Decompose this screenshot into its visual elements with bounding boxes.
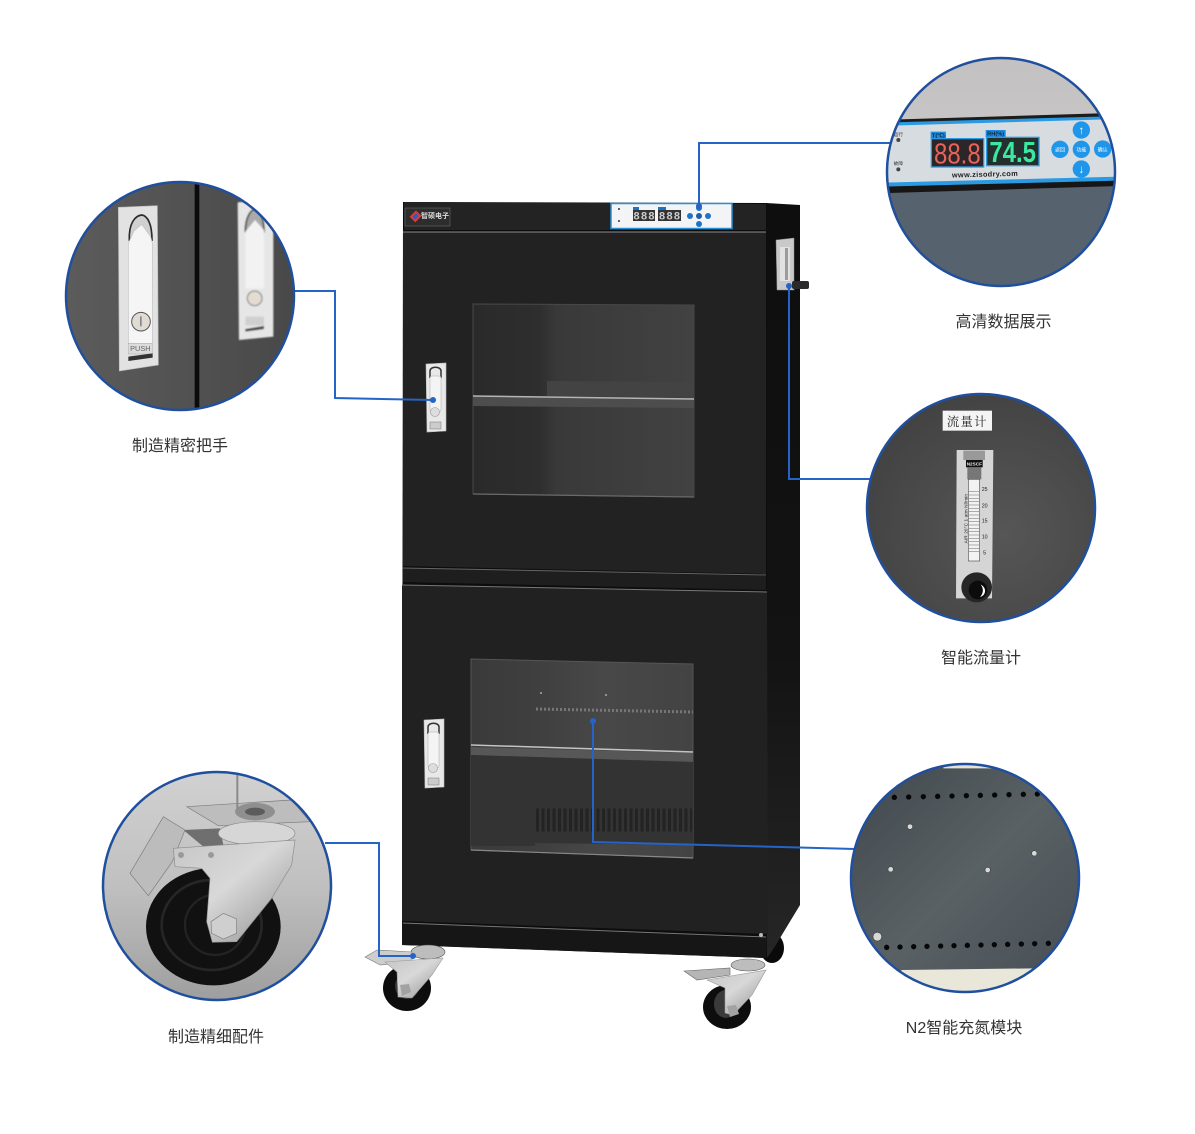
status labels: 运行: [894, 131, 903, 138]
brand logo: [405, 208, 450, 226]
cabinet top header: [404, 202, 766, 230]
flow meter body: N2SCF: [967, 461, 982, 466]
flow meter body: 20: [982, 503, 988, 509]
control panel: 888: [659, 210, 680, 222]
fork: [173, 840, 295, 942]
flow meter body: AIR 20°C 1 atm Nl/min: [963, 494, 968, 543]
label: display: 高清数据展示: [955, 313, 1052, 331]
control panel: [611, 204, 732, 228]
cabinet base: [402, 923, 767, 958]
wheel: [146, 868, 281, 985]
control buttons: ↑: [1078, 125, 1084, 137]
cabinet backing: [402, 202, 767, 958]
cabinet: [365, 202, 809, 1029]
label: N2 module: N2智能充氮模块: [906, 1019, 1022, 1037]
bolt: [211, 913, 237, 939]
connector: display panel: [696, 143, 890, 209]
temperature readout: T(℃): [932, 133, 945, 140]
front left caster: [365, 945, 445, 1011]
flow meter body: 15: [982, 519, 988, 525]
flow meter label: 流量计: [947, 412, 988, 430]
upper door handle: [426, 363, 446, 432]
callout: N2 module close-up: [845, 760, 1085, 1000]
bottom hole row: [884, 941, 1051, 950]
callout: handle close-up: [60, 175, 300, 415]
connector: N2 module: [590, 718, 855, 849]
cabinet side panel: [766, 203, 800, 958]
flow meter body: 5: [983, 550, 986, 556]
rear handle: [238, 198, 273, 340]
control panel: 888: [634, 210, 654, 222]
connector: door handle: [295, 291, 436, 403]
status labels: [894, 131, 903, 171]
flow meter knob: [961, 572, 992, 602]
front handle: PUSH: [130, 344, 151, 353]
swivel bearing: [218, 822, 295, 845]
lower door: [402, 585, 768, 934]
callout: display close-up: [880, 50, 1120, 290]
lower window: [471, 659, 693, 858]
top hole row: [892, 791, 1040, 800]
status labels: 故障: [894, 160, 903, 167]
flow meter body: [956, 450, 993, 598]
website text: www.zisodry.com: [951, 169, 1018, 180]
connector: flow meter: [786, 283, 872, 479]
humidity readout: 74.5: [989, 137, 1036, 169]
side flow meter: [776, 238, 809, 290]
connector: caster: [325, 843, 416, 959]
divider between doors: [403, 568, 766, 590]
upper door: [403, 232, 766, 574]
brand logo: 智硕电子: [421, 211, 449, 220]
upper window: [473, 304, 694, 497]
lower door handle: [424, 719, 444, 788]
label: caster: 制造精细配件: [168, 1028, 264, 1046]
cream edges: [901, 968, 1032, 991]
flow meter body: 10: [982, 535, 988, 541]
temperature readout: 88.8: [934, 138, 981, 170]
screws: [873, 824, 1037, 941]
shadow under plate: [183, 828, 223, 847]
rear right caster wheel: [760, 933, 784, 963]
callout: flow meter close-up: [860, 390, 1100, 630]
humidity readout: RH(%): [987, 132, 1004, 138]
front handle: [118, 206, 158, 371]
flow meter body: 25: [982, 487, 988, 493]
control buttons: ↓: [1078, 164, 1084, 176]
humidity readout: [986, 130, 1039, 169]
brake lever: [130, 817, 185, 896]
mounting plate: [187, 773, 310, 826]
control buttons: [1051, 121, 1111, 178]
label: handle: 制造精密把手: [132, 437, 228, 455]
control buttons: 返回: [1055, 147, 1065, 154]
label: flow meter: 智能流量计: [941, 649, 1021, 667]
front right caster: [684, 959, 766, 1029]
control buttons: 确认: [1098, 146, 1108, 153]
callout: caster close-up: [95, 765, 335, 1005]
control buttons: 功能: [1076, 147, 1086, 154]
